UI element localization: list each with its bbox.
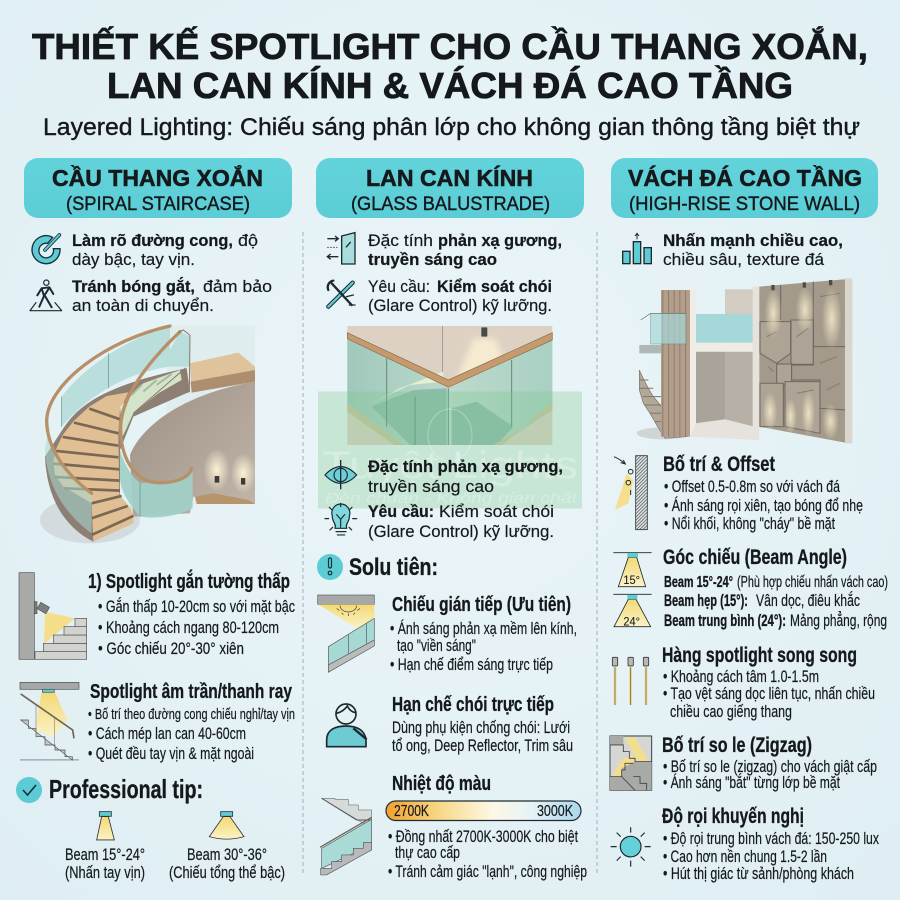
icon: person with glare shield bbox=[327, 704, 367, 747]
chart: colour temperature bar: 3000K bbox=[537, 803, 573, 820]
text: placement and offset: Bố trí & Offset bbox=[663, 452, 775, 476]
text: reflective property repeated: Đặc tính phản xạ gương, bbox=[368, 457, 563, 476]
text: reflective property repeated bbox=[368, 457, 563, 496]
icon: wide beam bbox=[209, 812, 244, 839]
text: parallel spotlight row: • Khoảng cách tâm 1.0-1.5m bbox=[663, 668, 819, 686]
text: parallel spotlight row: chiều cao giếng thang bbox=[670, 703, 792, 721]
text: colour temperature notes: thự cao cấp bbox=[395, 844, 460, 862]
text: low wall spotlight bbox=[88, 569, 295, 658]
icon: 24 degree beam: 24° bbox=[623, 614, 640, 628]
icon: exclamation badge bbox=[317, 554, 343, 580]
icon: parallel spotlights bbox=[612, 657, 649, 705]
text: emphasise height: Nhấn mạnh chiều cao, bbox=[663, 231, 843, 250]
text: colour temperature notes: • Tránh cảm giác "lạnh", công nghiệp bbox=[388, 863, 587, 881]
heading: spiral staircase: CẦU THANG XOẮN bbox=[52, 164, 263, 191]
chart: colour temperature bar: 2700K bbox=[394, 803, 429, 820]
illustration: stone wall atrium bbox=[637, 278, 852, 443]
text: beam angle: Beam trung bình (24°): bbox=[664, 612, 786, 630]
text: reflective property: Đặc tính bbox=[368, 231, 433, 250]
text: limit direct glare: tổ ong, Deep Reflector, Trim sâu bbox=[392, 737, 573, 755]
text: limit direct glare bbox=[392, 693, 573, 755]
icon: mirror reflection bbox=[327, 233, 355, 264]
illustration: glass balustrade corner bbox=[347, 326, 552, 445]
text: limit direct glare: Dùng phụ kiện chống chói: Lưới bbox=[392, 719, 570, 737]
text: recommended illuminance bbox=[662, 804, 880, 883]
text: indirect lighting: • Hạn chế điểm sáng trực tiếp bbox=[390, 656, 553, 674]
text: placement and offset: • Nổi khối, không "cháy" bề mặt bbox=[664, 515, 835, 533]
heading: priorities: Solu tiên: bbox=[349, 554, 438, 581]
heading: professional tip: Professional tip: bbox=[49, 774, 203, 804]
text: ceiling spotlight: • Cách mép lan can 40-60cm bbox=[88, 725, 246, 743]
panel: high-rise stone wall bbox=[610, 158, 888, 883]
text: wide beam: (Chiếu tổng thể bậc) bbox=[169, 864, 285, 882]
watermark: Tuyệt Lights bbox=[322, 445, 578, 487]
watermark bbox=[318, 392, 582, 508]
title bbox=[32, 25, 868, 106]
text: low wall spotlight: • Khoảng cách ngang 80-120cm bbox=[98, 619, 279, 637]
text: curve clarity: Làm rõ đường cong, bbox=[72, 231, 233, 250]
text: recommended illuminance: • Cao hơn nền chung 1.5-2 lần bbox=[663, 848, 827, 866]
text: avoid harsh shadows: an toàn di chuyển. bbox=[72, 296, 214, 315]
text: narrow beam: Beam 15°-24° bbox=[65, 846, 145, 864]
icon: check badge bbox=[16, 777, 42, 803]
text: beam angle: Beam 15°-24° bbox=[664, 574, 733, 591]
text: low wall spotlight: • Góc chiếu 20°-30° xiên bbox=[98, 640, 244, 658]
heading: spiral staircase: (SPIRAL STAIRCASE) bbox=[66, 194, 250, 215]
text: wide beam: Beam 30°-36° bbox=[187, 846, 267, 864]
text: reflective property: phản xạ gương, bbox=[438, 231, 562, 250]
text: parallel spotlight row bbox=[662, 643, 875, 721]
icon: rising bars bbox=[623, 233, 651, 264]
icon: narrow beam bbox=[97, 812, 114, 840]
text: narrow beam: (Nhấn tay vịn) bbox=[65, 864, 145, 882]
text: placement and offset: • Offset 0.5-0.8m so với vách đá bbox=[664, 478, 841, 496]
text: reflective property: truyền sáng cao bbox=[368, 250, 497, 269]
text: zigzag layout bbox=[662, 733, 877, 792]
heading: spiral staircase bbox=[24, 158, 292, 218]
text: emphasise height bbox=[663, 231, 843, 269]
heading: stone wall bbox=[611, 158, 878, 218]
text: indirect lighting: tạo "viền sáng" bbox=[397, 637, 476, 655]
text: indirect lighting: Chiếu gián tiếp (Ưu tiên) bbox=[392, 593, 571, 616]
panel: glass balustrade bbox=[316, 158, 587, 881]
heading: glass balustrade: LAN CAN KÍNH bbox=[366, 164, 533, 191]
text: glare control requirement: Kiểm soát chói bbox=[437, 277, 552, 296]
icon: low wall spotlight diagram bbox=[19, 573, 87, 659]
text: ceiling spotlight: • Quét đều tay vịn & mặt ngoài bbox=[88, 745, 254, 763]
icon: light bulb bbox=[325, 503, 357, 535]
title: THIẾT KẾ SPOTLIGHT CHO CẦU THANG XOẮN, bbox=[32, 25, 868, 67]
text: glare control requirement: (Glare Control) kỹ lưỡng. bbox=[368, 296, 552, 315]
icon: 24 degree beam bbox=[613, 594, 652, 628]
text: ceiling spotlight bbox=[88, 680, 295, 763]
heading: glass balustrade bbox=[316, 158, 584, 218]
text: indirect lighting bbox=[390, 593, 577, 674]
heading: stone wall: VÁCH ĐÁ CAO TẦNG bbox=[628, 164, 862, 191]
icon: eye bbox=[325, 460, 357, 489]
text: placement and offset bbox=[663, 452, 863, 533]
text: avoid harsh shadows: Tránh bóng gắt, bbox=[72, 277, 195, 296]
illustration: spiral staircase bbox=[40, 326, 256, 543]
icon: ceiling spotlight diagram bbox=[20, 682, 79, 760]
text: reflective property repeated: truyền sáng cao bbox=[368, 477, 494, 496]
text: beam angle: Vân dọc, điêu khắc bbox=[756, 591, 860, 610]
text: curve clarity: độ bbox=[238, 231, 258, 250]
text: glare control requirement bbox=[368, 277, 552, 315]
icon: offset diagram bbox=[614, 456, 647, 530]
text: glare control repeated: (Glare Control) kỹ lưỡng. bbox=[368, 522, 554, 541]
text: glare control requirement: Yêu cầu: bbox=[368, 277, 430, 296]
text: ceiling spotlight: Spotlight âm trần/thanh ray bbox=[90, 680, 292, 703]
text: low wall spotlight: • Gắn thấp 10-20cm so với mặt bậc bbox=[98, 597, 295, 616]
text: glare control repeated: Yêu cầu: bbox=[368, 502, 434, 521]
text: zigzag layout: Bố trí so le (Zigzag) bbox=[662, 733, 812, 757]
icon: 15 degree beam bbox=[613, 553, 652, 587]
text: recommended illuminance: Độ rọi khuyến nghị bbox=[662, 804, 804, 828]
watermark: Đèn chuẩn - Không gian chất bbox=[325, 490, 578, 507]
text: low wall spotlight: 1) Spotlight gắn tường thấp bbox=[88, 569, 290, 593]
subtitle: Layered Lighting: Chiếu sáng phân lớp cho không gian thông tầng biệt thự bbox=[43, 114, 860, 141]
icon: zigzag layout bbox=[610, 736, 652, 790]
text: colour temperature notes: • Đồng nhất 2700K-3000K cho biệt bbox=[388, 828, 578, 846]
text: emphasise height: chiều sâu, texture đá bbox=[663, 250, 825, 269]
heading: stone wall: (HIGH-RISE STONE WALL) bbox=[629, 194, 860, 215]
text: ceiling spotlight: • Bố trí theo đường cong chiếu nghỉ/tay vịn bbox=[88, 706, 295, 723]
icon: 15 degree beam: 15° bbox=[623, 573, 640, 587]
panel: spiral staircase bbox=[16, 158, 295, 882]
icon: sun illuminance bbox=[611, 827, 651, 867]
text: indirect lighting: • Ánh sáng phản xạ mềm lên kính, bbox=[390, 619, 577, 638]
text: glare control repeated: Kiểm soát chói bbox=[439, 502, 554, 521]
text: beam angle: Beam hẹp (15°): bbox=[664, 592, 748, 610]
text: zigzag layout: • Ánh sáng "bắt" từng lớp bề mặt bbox=[663, 773, 840, 792]
text: glare control repeated bbox=[368, 502, 554, 541]
heading: glass balustrade: (GLASS BALUSTRADE) bbox=[351, 194, 550, 215]
icon: tools bbox=[328, 281, 355, 307]
chart: colour temperature bar bbox=[386, 801, 581, 820]
text: colour temperature notes bbox=[388, 828, 587, 881]
text: reflective property bbox=[368, 231, 562, 269]
text: avoid harsh shadows: đảm bảo bbox=[203, 277, 272, 296]
text: colour temperature heading: Nhiệt độ màu bbox=[392, 772, 491, 795]
text: wide beam bbox=[169, 846, 285, 882]
icon: stair with glass railing bbox=[320, 798, 372, 875]
text: beam angle bbox=[663, 545, 888, 630]
icon: indirect lighting diagram bbox=[318, 595, 374, 672]
icon: curve gauge bbox=[32, 235, 60, 264]
text: curve clarity: dày bậc, tay vịn. bbox=[72, 250, 195, 269]
text: limit direct glare: Hạn chế chói trực tiếp bbox=[392, 693, 554, 716]
icon: walking person bbox=[30, 280, 62, 311]
text: narrow beam bbox=[65, 846, 145, 882]
text: avoid harsh shadows bbox=[72, 277, 272, 315]
title: LAN CAN KÍNH & VÁCH ĐÁ CAO TẦNG bbox=[107, 65, 793, 106]
text: curve clarity bbox=[72, 231, 258, 269]
